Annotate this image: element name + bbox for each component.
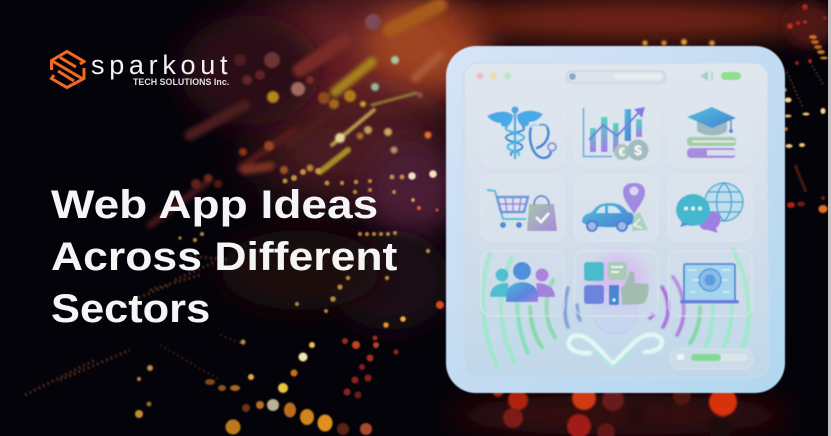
- right side circuit lights: [783, 4, 828, 213]
- icon: growth chart with coins: €: [619, 145, 626, 159]
- background glows: [180, 0, 831, 435]
- glow circle: [593, 290, 637, 334]
- bokeh streaks upper: [150, 5, 440, 225]
- icon: graduation cap and books: [687, 107, 736, 158]
- icon: caduceus and stethoscope: [487, 106, 556, 158]
- icon: shopping cart and bag: [487, 190, 557, 231]
- title: Sectors: [51, 287, 210, 331]
- title: Across Different: [51, 235, 397, 279]
- circuit dot rows: [25, 168, 444, 435]
- title: Web App Ideas: [51, 183, 378, 227]
- icon: growth chart with coins: $: [634, 142, 642, 158]
- right edge strip: [828, 0, 831, 436]
- glow waves: [483, 250, 749, 368]
- address bar: [565, 70, 667, 84]
- icon: chat bubbles and globe: [676, 183, 743, 233]
- logo tagline: TECH SOLUTIONS Inc.: [133, 77, 229, 87]
- logo: [49, 50, 232, 90]
- panel: inner screen: [464, 63, 768, 378]
- logo wordmark: sparkout: [91, 50, 232, 80]
- tiles: [481, 100, 752, 316]
- icon: growth chart with coins: [584, 107, 648, 160]
- icon: app grid and thumbs up: [584, 262, 649, 305]
- icon: sparkout hexagon: [49, 50, 86, 90]
- bokeh lights upper: [191, 14, 715, 189]
- status icons: [700, 71, 753, 81]
- bottom swoosh: [568, 335, 662, 367]
- icon: car and location pin: [582, 183, 648, 231]
- window buttons: [476, 72, 511, 80]
- slider pill: [670, 349, 753, 369]
- title: [51, 183, 397, 331]
- bottom red bokeh: [493, 386, 737, 436]
- icon: group of people: [490, 262, 555, 302]
- icon: laptop with target: [680, 264, 739, 304]
- center glow: [590, 254, 646, 310]
- panel: outer frame: [446, 46, 785, 393]
